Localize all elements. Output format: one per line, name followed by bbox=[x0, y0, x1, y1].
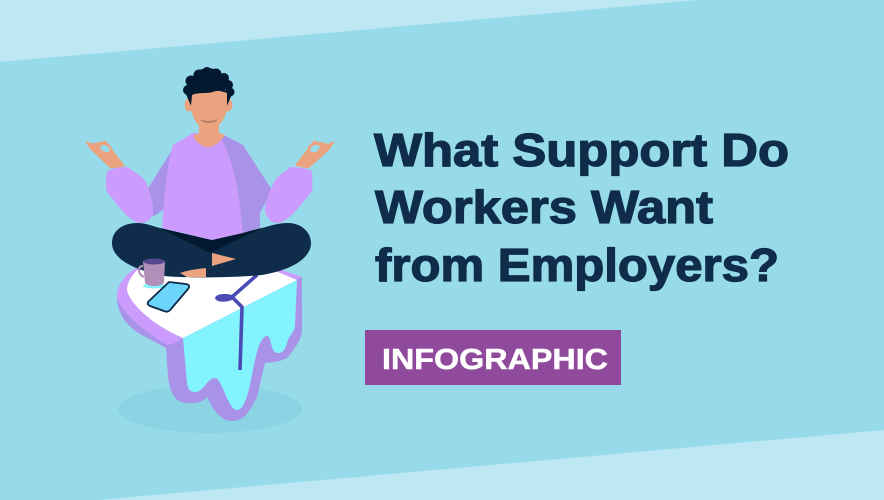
badge: infographic: INFOGRAPHIC bbox=[382, 344, 608, 376]
right sleeve bbox=[265, 167, 312, 223]
illustration: meditating person on melting platform bbox=[85, 67, 335, 433]
neck and collar bbox=[193, 120, 225, 147]
title: from Employers? bbox=[375, 239, 779, 291]
right hand bbox=[295, 140, 335, 168]
title: Workers Want bbox=[375, 181, 713, 233]
crack bbox=[232, 275, 257, 370]
floor shadow bbox=[118, 385, 302, 433]
left sleeve bbox=[106, 167, 153, 223]
phone bbox=[148, 282, 189, 312]
badge: infographic bbox=[365, 330, 621, 385]
title: What Support Do bbox=[374, 124, 789, 176]
title bbox=[374, 124, 789, 291]
head bbox=[183, 67, 234, 130]
torso bbox=[147, 133, 272, 240]
hair bbox=[183, 67, 234, 108]
melting platform bbox=[117, 267, 302, 421]
feet bbox=[212, 253, 236, 266]
face bbox=[191, 91, 227, 130]
left hand bbox=[85, 140, 125, 168]
legs bbox=[112, 223, 311, 277]
mouth bbox=[201, 120, 217, 122]
mug bbox=[139, 258, 165, 288]
